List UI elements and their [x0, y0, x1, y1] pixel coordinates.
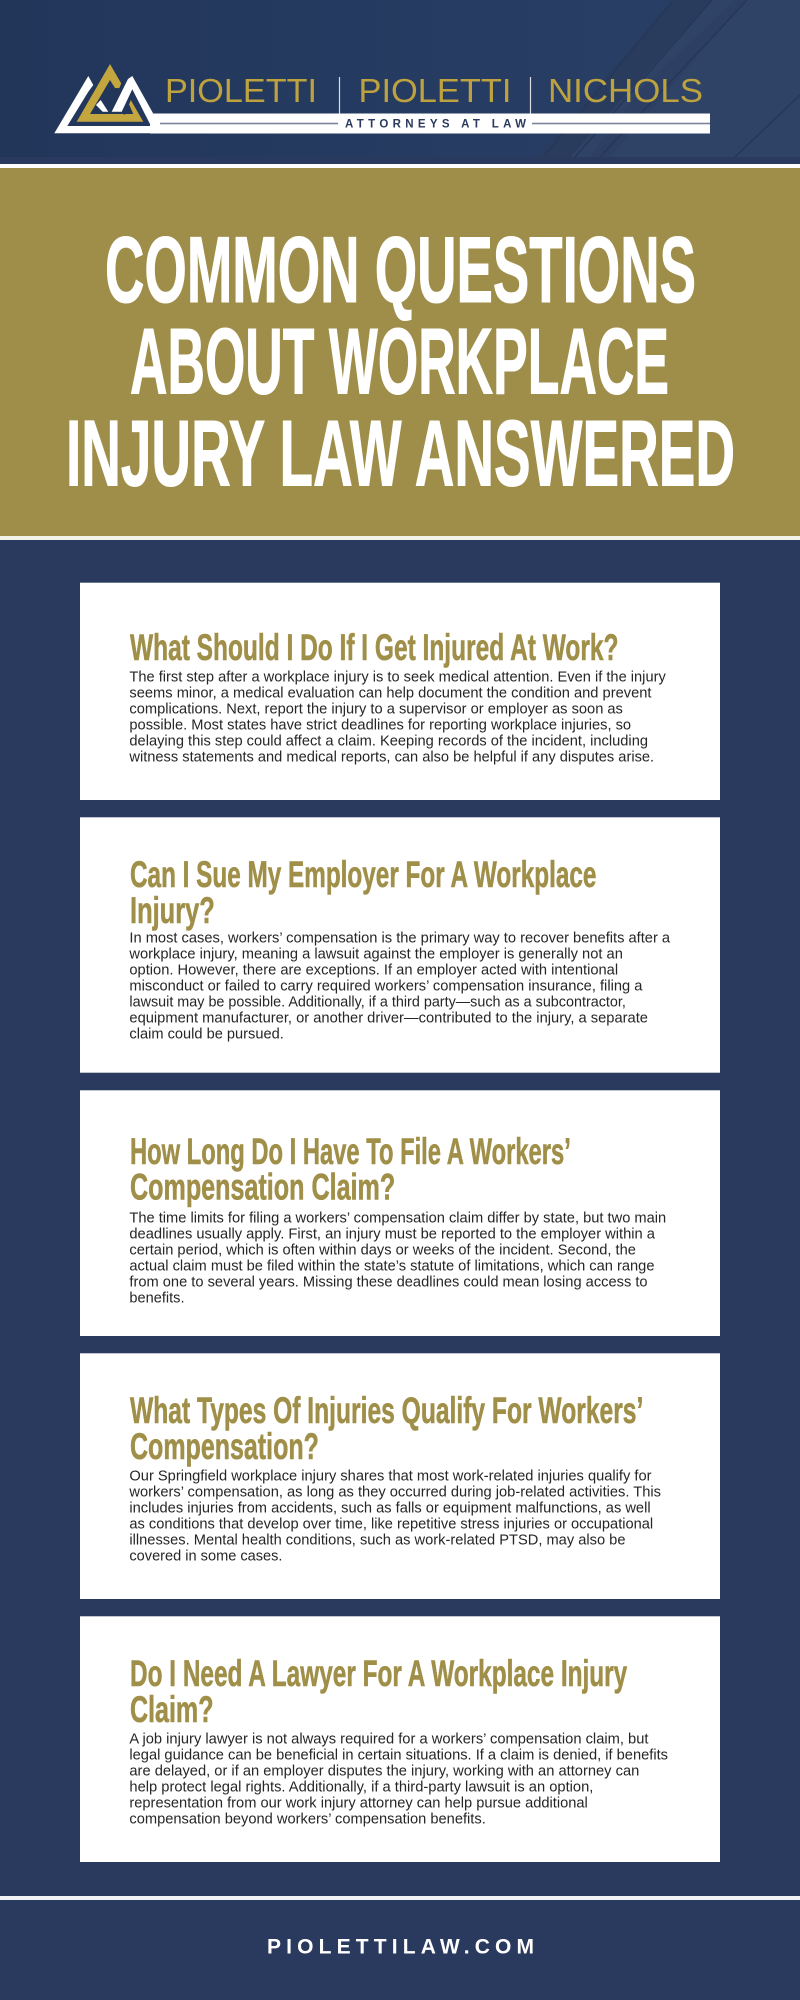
inner cut-out: [90, 80, 133, 114]
body text: In most cases, workers’ compensation is the primary way to recover benefits after a: [129, 931, 671, 947]
body text: [128, 931, 671, 1043]
body text: as conditions that develop over time, like repetitive stress injuries or occupational: [129, 1516, 653, 1532]
body text: option. However, there are exceptions. If an employer acted with intentional: [129, 963, 618, 979]
header band with logo: [0, 0, 800, 157]
white right peak: [112, 76, 155, 126]
body text: lawsuit may be possible. Additionally, if a third party—such as a subcontractor,: [129, 995, 626, 1011]
heading: [130, 1652, 627, 1730]
heading: Injury?: [130, 889, 215, 931]
body text: misconduct or failed to carry required workers’ compensation insurance, filing a: [129, 979, 643, 995]
firm name: PIOLETTI: [358, 72, 512, 109]
white rule below title: [0, 536, 800, 540]
gold triangle: [77, 64, 143, 122]
panel: question 3: [80, 1090, 720, 1336]
white bar with tagline: [150, 114, 710, 134]
logo mark: [54, 64, 155, 133]
heading: [130, 853, 596, 931]
white bar with tagline: ATTORNEYS AT LAW: [345, 119, 526, 131]
body text: compensation beyond workers’ compensation benefits.: [129, 1811, 486, 1827]
dividers: [340, 77, 530, 114]
title: [66, 217, 735, 506]
body text: [129, 1210, 666, 1306]
body text: [128, 670, 666, 766]
logo: [54, 64, 710, 134]
title panel: [0, 168, 800, 536]
body text: complications. Next, report the injury to a supervisor or employer as soon as: [129, 702, 623, 718]
body text: from one to several years. Missing these deadlines could mean losing access to: [129, 1274, 648, 1290]
body text: benefits.: [129, 1290, 184, 1306]
body text: covered in some cases.: [129, 1548, 282, 1564]
white rule above title: [0, 164, 800, 168]
header background: [0, 0, 800, 157]
panel: question 4: [80, 1353, 720, 1599]
heading: Compensation?: [130, 1425, 319, 1467]
heading: [130, 1130, 571, 1208]
white left leg and base: [54, 76, 155, 133]
firm name: [165, 72, 703, 109]
body text: workers’ compensation, as long as they occurred during job-related activities. This: [128, 1484, 661, 1500]
firm name: NICHOLS: [548, 72, 703, 109]
body text: witness statements and medical reports, can also be helpful if any disputes arise.: [128, 750, 654, 766]
small white peak: [96, 100, 108, 112]
body text: illnesses. Mental health conditions, such as work-related PTSD, may also be: [129, 1532, 626, 1548]
panel: question 1: [80, 583, 720, 800]
heading: Claim?: [130, 1688, 214, 1730]
body text: Our Springfield workplace injury shares that most work-related injuries qualify for: [129, 1468, 652, 1484]
body text: [128, 1468, 661, 1564]
body text: A job injury lawyer is not always required for a workers’ compensation claim, but: [129, 1731, 648, 1747]
body text: certain period, which is often within days or weeks of the incident. Second, the: [129, 1242, 636, 1258]
panel: question 5: [80, 1616, 720, 1862]
body text: [129, 1731, 668, 1827]
building texture: [538, 0, 800, 157]
body text: delaying this step could affect a claim. Keeping records of the incident, including: [129, 734, 648, 750]
body text: legal guidance can be beneficial in certain situations. If a claim is denied, if benefits: [129, 1747, 668, 1763]
body text: claim could be pursued.: [129, 1027, 284, 1043]
body text: workplace injury, meaning a lawsuit against the employer is generally not an: [128, 947, 623, 963]
body text: are delayed, or if an employer disputes the injury, working with an attorney can: [129, 1763, 639, 1779]
body text: help protect legal rights. Additionally, if a third-party lawsuit is an option,: [129, 1779, 593, 1795]
body text: equipment manufacturer, or another driver—contributed to the injury, a separate: [129, 1011, 648, 1027]
body text: representation from our work injury attorney can help pursue additional: [129, 1795, 588, 1811]
white rule above footer: [0, 1896, 800, 1900]
panel: question 2: [80, 817, 720, 1073]
heading: Compensation Claim?: [130, 1166, 395, 1208]
body text: includes injuries from accidents, such as falls or equipment malfunctions, as well: [129, 1500, 651, 1516]
body text: deadlines usually apply. First, an injury must be reported to the employer within a: [129, 1226, 656, 1242]
body text: The first step after a workplace injury is to seek medical attention. Even if the injury: [129, 670, 666, 686]
body text: seems minor, a medical evaluation can help document the condition and prevent: [129, 686, 651, 702]
heading: [130, 1389, 643, 1467]
body text: possible. Most states have strict deadlines for reporting workplace injuries, so: [129, 718, 631, 734]
footer website: PIOLETTILAW.COM: [267, 1935, 534, 1958]
navy band behind right peak: [118, 84, 129, 112]
body text: actual claim must be filed within the state’s statute of limitations, which can range: [129, 1258, 654, 1274]
body text: The time limits for filing a workers’ compensation claim differ by state, but two main: [129, 1210, 666, 1226]
firm name: PIOLETTI: [165, 72, 317, 109]
